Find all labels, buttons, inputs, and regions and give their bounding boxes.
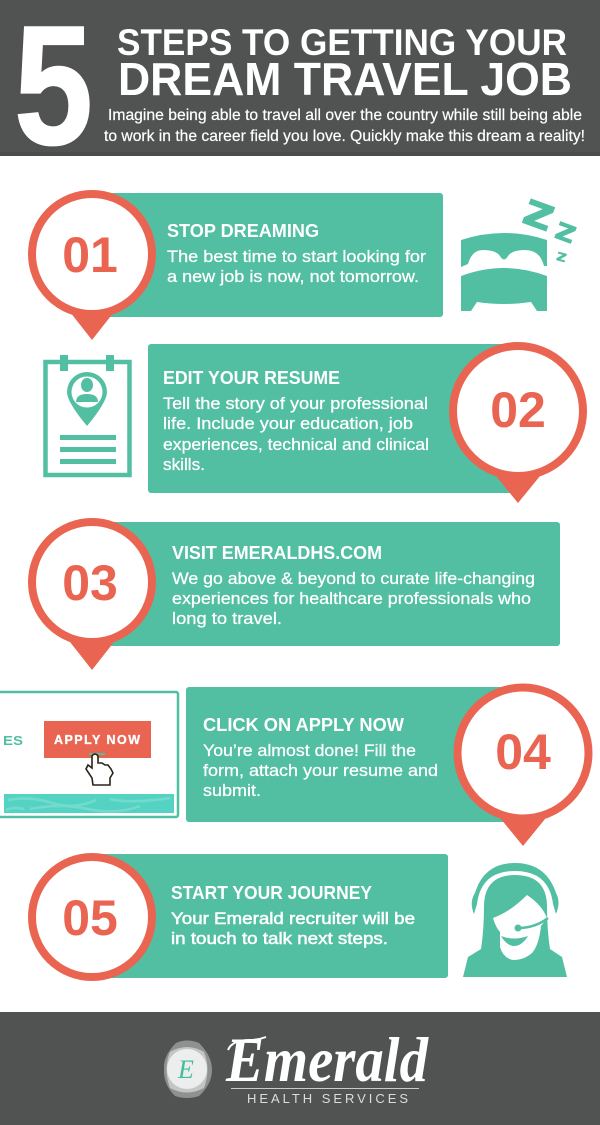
panel: step 2 card: life. Include your education, job — [163, 415, 413, 433]
number pin 05: 05 — [62, 890, 118, 946]
panel: step 2 card: Tell the story of your professional — [163, 395, 428, 413]
website apply button illustration: ES — [3, 733, 23, 748]
panel: step 4 card: submit. — [203, 782, 261, 800]
number pin 05 — [32, 857, 152, 977]
website apply button illustration — [0, 692, 178, 817]
intro text: Imagine being able to travel all over the country while still being able — [108, 107, 582, 124]
title: DREAM TRAVEL JOB — [118, 53, 572, 105]
step 1 — [32, 193, 577, 340]
panel: step 5 card: in touch to talk next steps. — [171, 930, 388, 948]
logo mark: E — [177, 1055, 194, 1084]
panel: step 5 card: START YOUR JOURNEY — [171, 882, 373, 903]
step 5 — [32, 854, 567, 978]
panel: step 3 card: We go above & beyond to curate life-changing — [172, 570, 535, 588]
logo mark — [164, 1040, 212, 1098]
step 3 — [32, 522, 560, 670]
logo wordmark: Emerald — [225, 1024, 429, 1095]
intro text — [104, 107, 585, 145]
panel: step 4 card — [186, 687, 524, 822]
panel: step 3 card: long to travel. — [172, 610, 282, 628]
header banner — [0, 0, 600, 181]
panel: step 4 card: CLICK ON APPLY NOW — [203, 714, 405, 735]
step 2 — [46, 344, 583, 503]
panel: step 3 card — [100, 522, 560, 646]
title — [117, 22, 572, 105]
website apply button illustration: APPLY NOW — [54, 733, 140, 747]
panel: step 1 card — [100, 193, 443, 317]
number pin 04 — [458, 688, 588, 846]
icon: resume with location pin — [46, 355, 130, 475]
icon: hand cursor — [86, 754, 113, 785]
panel: step 3 card: VISIT EMERALDHS.COM — [172, 542, 382, 563]
icon: sleeping bed — [461, 198, 577, 311]
panel: step 2 card: EDIT YOUR RESUME — [163, 367, 340, 388]
panel: step 5 card — [100, 854, 448, 978]
number pin 03 — [32, 522, 152, 670]
panel: step 5 card: Your Emerald recruiter will be — [171, 910, 415, 928]
panel: step 1 card: STOP DREAMING — [167, 220, 319, 241]
footer banner — [0, 1012, 600, 1125]
panel: step 1 card: The best time to start looking for — [167, 248, 427, 266]
number pin 02 — [453, 346, 583, 503]
panel: step 3 card: experiences for healthcare professionals who — [172, 590, 531, 608]
panel: step 2 card: skills. — [163, 456, 205, 474]
number pin 01 — [32, 194, 152, 340]
panel: step 2 card — [148, 344, 523, 493]
logo tagline: HEALTH SERVICES — [247, 1091, 408, 1106]
number pin 04: 04 — [495, 724, 551, 780]
number pin 01: 01 — [62, 227, 118, 283]
intro text: to work in the career field you love. Quickly make this dream a reality! — [104, 128, 585, 145]
panel: step 2 card: experiences, technical and clinical — [163, 436, 429, 454]
panel: step 4 card: You’re almost done! Fill the — [203, 742, 416, 760]
panel: step 1 card: a new job is now, not tomorrow. — [167, 268, 419, 286]
title: STEPS TO GETTING YOUR — [117, 22, 567, 63]
number pin 02: 02 — [490, 382, 546, 438]
icon: recruiter with headset — [463, 863, 567, 977]
step 4 — [0, 687, 588, 846]
number pin 03: 03 — [62, 555, 118, 611]
panel: step 4 card: form, attach your resume and — [203, 762, 438, 780]
